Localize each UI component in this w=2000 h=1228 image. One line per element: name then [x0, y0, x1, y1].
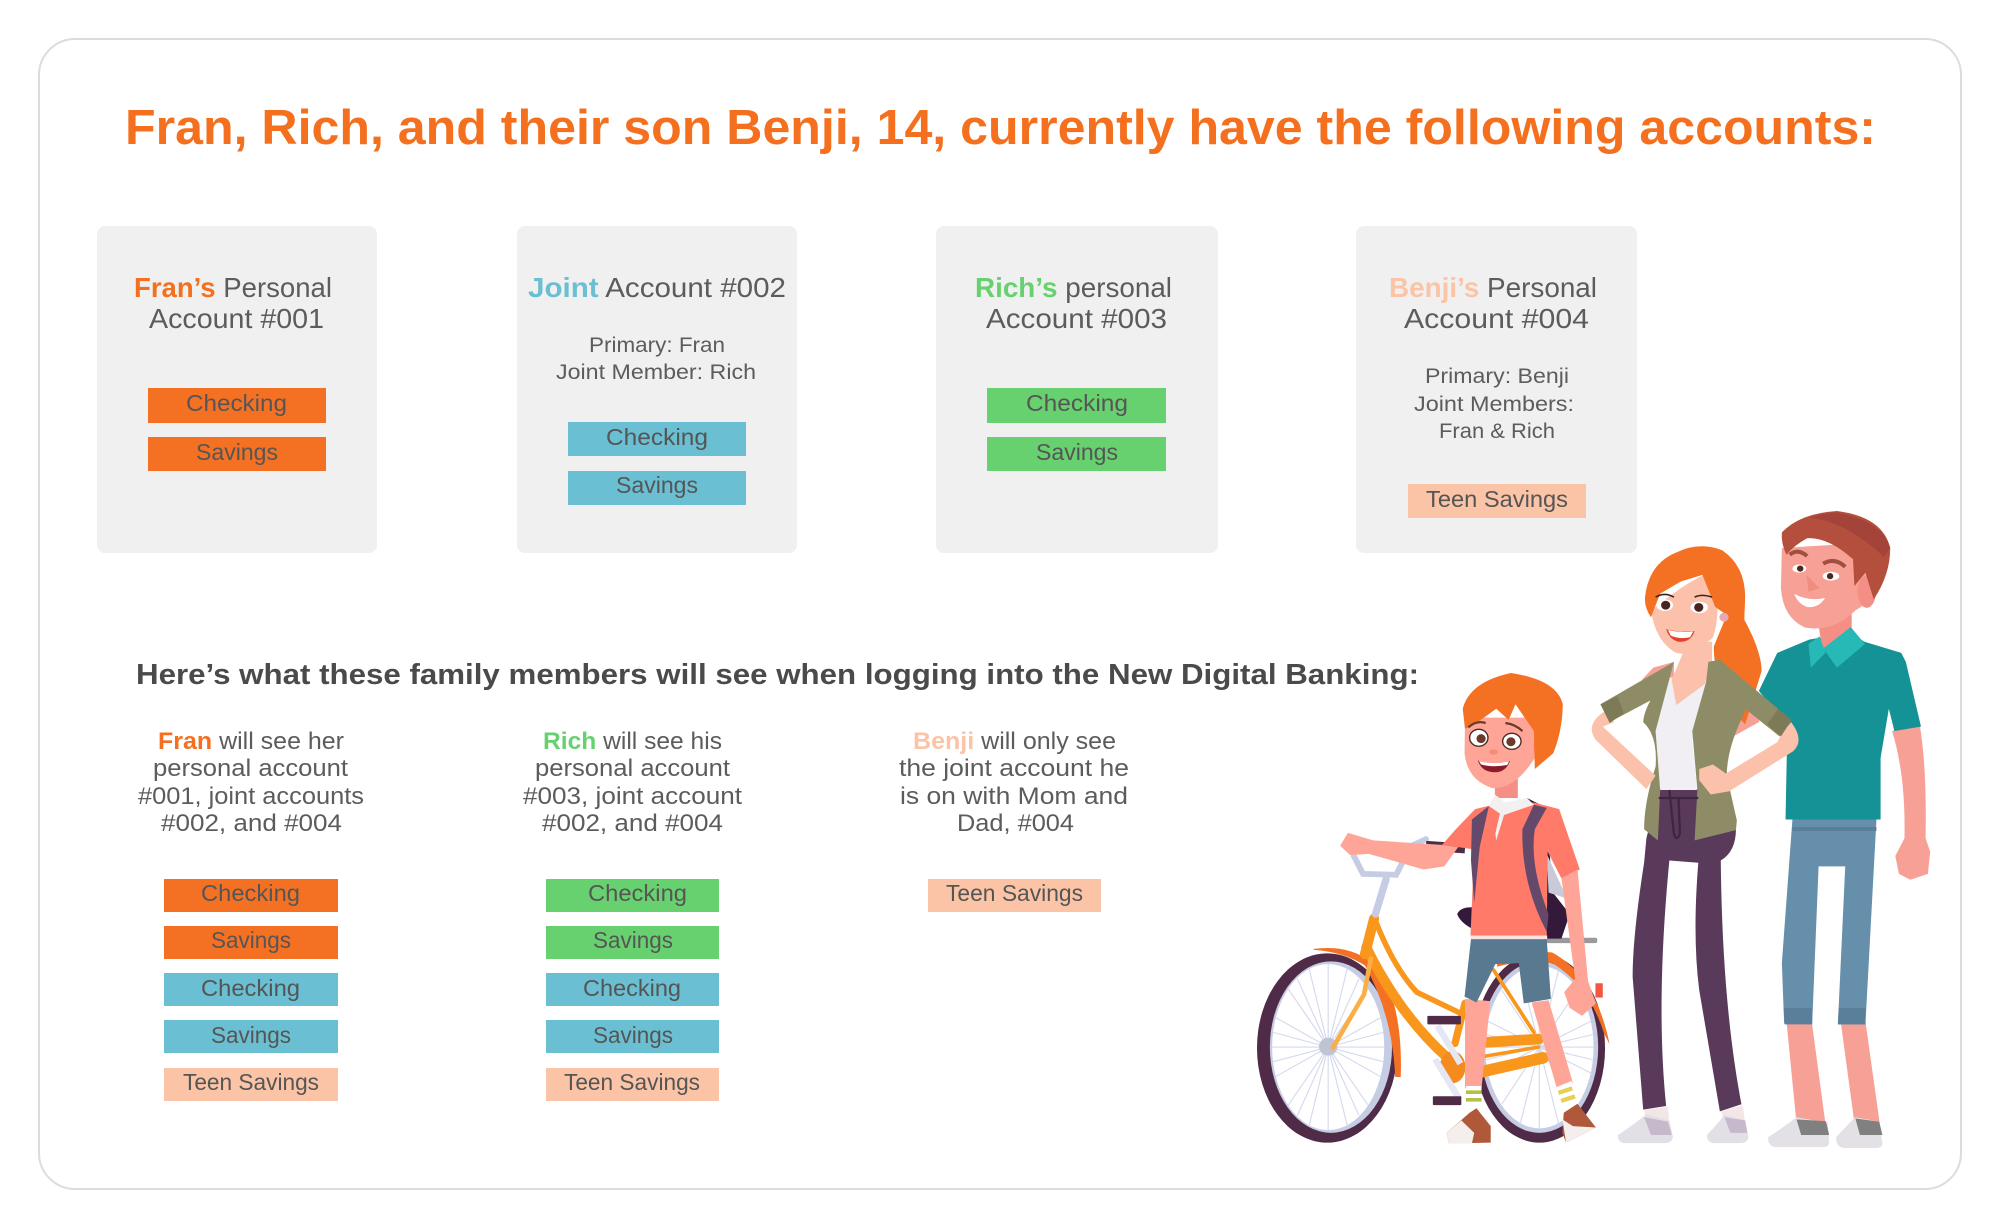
jacket sleeves: [1600, 662, 1791, 736]
pill: checking: [568, 422, 746, 456]
illustration: family with bicycle: [1257, 511, 1930, 1148]
bicycle: [1257, 839, 1610, 1143]
pill: checking: [148, 388, 326, 423]
pill: savings: Savings: [616, 472, 698, 498]
text: Benji's view: is on with Mom and: [900, 783, 1128, 810]
panel: joint account: [517, 226, 797, 553]
cranks and pedals: [1427, 1016, 1461, 1105]
pill: teen savings: [928, 879, 1101, 912]
man's collar: [1808, 627, 1865, 668]
members: joint account: Joint Member: Rich: [556, 360, 756, 384]
man: [1642, 511, 1930, 1148]
column: Rich's view: [523, 728, 742, 1101]
members: joint account: [556, 333, 756, 384]
backpack straps: [1471, 805, 1549, 932]
boy's shorts: [1465, 939, 1551, 1003]
boy's hair: [1463, 673, 1563, 769]
fenders: [1313, 948, 1610, 1077]
pill: checking: Checking: [186, 390, 287, 416]
pill: joint checking: [546, 973, 719, 1006]
socks: [1466, 1081, 1579, 1111]
title: Fran, Rich, and their son Benji, 14, currently have the following accounts:: [125, 101, 1876, 155]
pill: savings: [546, 926, 719, 959]
text: Fran's view: personal account: [153, 755, 348, 782]
text: Benji's view: Dad, #004: [957, 810, 1074, 837]
heading: Rich's account: Account #003: [986, 303, 1167, 334]
boy's near arm: [1561, 869, 1596, 1016]
panel: Rich's personal account: [936, 226, 1218, 553]
woman's face: [1656, 594, 1729, 642]
pill: teen savings: Teen Savings: [564, 1069, 700, 1095]
text: Fran's view: #002, and #004: [161, 810, 342, 837]
pill: checking: [546, 879, 719, 912]
pill: savings: Savings: [196, 439, 278, 465]
woman's neck and chest: [1672, 642, 1712, 705]
man's shoes: [1768, 1117, 1882, 1148]
pill: checking: Checking: [1026, 390, 1128, 416]
heading: Benji's account: [1389, 272, 1597, 334]
pill: savings: [568, 471, 746, 505]
man's jeans: [1782, 819, 1876, 1024]
rear wheel: [1474, 953, 1605, 1143]
heading: Fran's account: [134, 272, 332, 334]
woman's head: [1651, 575, 1718, 654]
pill: teen savings: [164, 1068, 338, 1101]
woman's right arm: [1699, 722, 1799, 794]
boy's shoes: [1447, 1104, 1596, 1144]
pill: joint checking: Checking: [201, 975, 300, 1001]
panel: Fran's personal account: [97, 226, 377, 553]
pill: joint savings: Savings: [593, 1022, 673, 1048]
heading: joint account: Joint Account #002: [528, 272, 786, 303]
text: Benji's view: the joint account he: [899, 755, 1129, 782]
man's face: [1790, 552, 1845, 607]
text: Rich's view: #002, and #004: [542, 810, 723, 837]
chainring: [1440, 1051, 1465, 1083]
pill: joint checking: [164, 973, 338, 1006]
text: Fran's view: Fran will see her: [158, 728, 344, 755]
text: Benji's view: [899, 728, 1129, 837]
boy's holding arm: [1340, 833, 1458, 869]
pill: checking: [987, 388, 1166, 423]
handlebar: [1354, 839, 1465, 914]
reflector: [1595, 983, 1603, 998]
pill: savings: [164, 926, 338, 959]
front wheel: [1257, 953, 1398, 1143]
pill: checking: Checking: [201, 880, 300, 906]
boy's shirt: [1442, 802, 1580, 936]
pill: checking: Checking: [588, 880, 687, 906]
text: Rich's view: #003, joint account: [523, 783, 742, 810]
boy's neck: [1495, 776, 1518, 798]
pill: teen savings: [1408, 484, 1586, 518]
heading: Benji's account: Account #004: [1404, 303, 1589, 334]
jacket right: [1692, 660, 1757, 840]
pill: savings: Savings: [1036, 439, 1118, 465]
pill: joint savings: [546, 1020, 719, 1053]
text: Rich's view: Rich will see his: [543, 728, 722, 755]
frame: [1333, 919, 1543, 1073]
section heading: Here’s what these family members will see when logging into the New Digital Banking:: [136, 659, 1419, 691]
rack: [1543, 938, 1597, 943]
pill: teen savings: Teen Savings: [1426, 486, 1568, 512]
members: Benji's account: Joint Members:: [1414, 392, 1574, 416]
pill: savings: Savings: [211, 927, 291, 953]
pill: teen savings: Teen Savings: [946, 880, 1083, 906]
man's head: [1781, 544, 1876, 629]
pill: joint savings: [164, 1020, 338, 1053]
saddle: [1457, 907, 1474, 930]
man's arm: [1892, 724, 1930, 880]
woman's hair: [1645, 546, 1745, 619]
members: joint account: Primary: Fran: [589, 333, 725, 357]
woman's left arm: [1592, 711, 1656, 789]
boy's collar: [1489, 794, 1534, 840]
heading: Rich's account: [975, 272, 1172, 334]
pill: joint checking: Checking: [583, 975, 681, 1001]
man's shirt: [1759, 633, 1921, 819]
pill: checking: [164, 879, 338, 912]
woman's trousers detail: [1659, 790, 1698, 838]
woman: [1592, 546, 1799, 1143]
backpack: [1527, 798, 1570, 939]
man's neck: [1818, 613, 1852, 648]
woman's shoes: [1618, 1114, 1748, 1143]
woman's ankles: [1644, 1105, 1745, 1124]
boy's ear: [1533, 735, 1549, 758]
man's hair: [1782, 511, 1890, 599]
pill: savings: Savings: [593, 927, 673, 953]
woman's trousers: [1633, 789, 1741, 1111]
pill: teen savings: [546, 1068, 719, 1101]
man's ear: [1858, 576, 1876, 608]
pill: joint savings: Savings: [211, 1022, 291, 1048]
ponytail and back hair: [1699, 548, 1762, 724]
members: Benji's account: Primary: Benji: [1425, 364, 1569, 388]
pill: checking: Checking: [606, 424, 708, 450]
panel: Benji's personal account: [1356, 226, 1637, 553]
text: Rich's view: [523, 728, 742, 837]
boy's face: [1468, 722, 1522, 772]
boy: [1340, 673, 1596, 1144]
man's hand on shoulder: [1642, 662, 1761, 740]
woman's shirt: [1656, 677, 1708, 790]
column: Fran's view: [138, 728, 364, 1101]
heading: Benji's account: Benji’s Personal: [1389, 272, 1597, 303]
text: Rich's view: personal account: [535, 755, 730, 782]
man's legs: [1786, 1021, 1880, 1124]
members: Benji's account: [1414, 364, 1574, 443]
text: Fran's view: [138, 728, 364, 837]
heading: Rich's account: Rich’s personal: [975, 272, 1172, 303]
text: Benji's view: Benji will only see: [913, 728, 1116, 755]
pill: savings: [987, 437, 1166, 471]
pill: savings: [148, 437, 326, 471]
heading: Fran's account: Fran’s Personal: [134, 272, 332, 303]
heading: Fran's account: Account #001: [149, 303, 324, 334]
jacket left: [1643, 662, 1674, 840]
column: Benji's view: [899, 728, 1129, 912]
members: Benji's account: Fran & Rich: [1439, 419, 1555, 443]
boy's head: [1465, 718, 1536, 788]
boy's legs: [1465, 999, 1573, 1088]
pill: teen savings: Teen Savings: [183, 1069, 319, 1095]
text: Fran's view: #001, joint accounts: [138, 783, 364, 810]
jeans cuffs: [1784, 827, 1876, 1024]
